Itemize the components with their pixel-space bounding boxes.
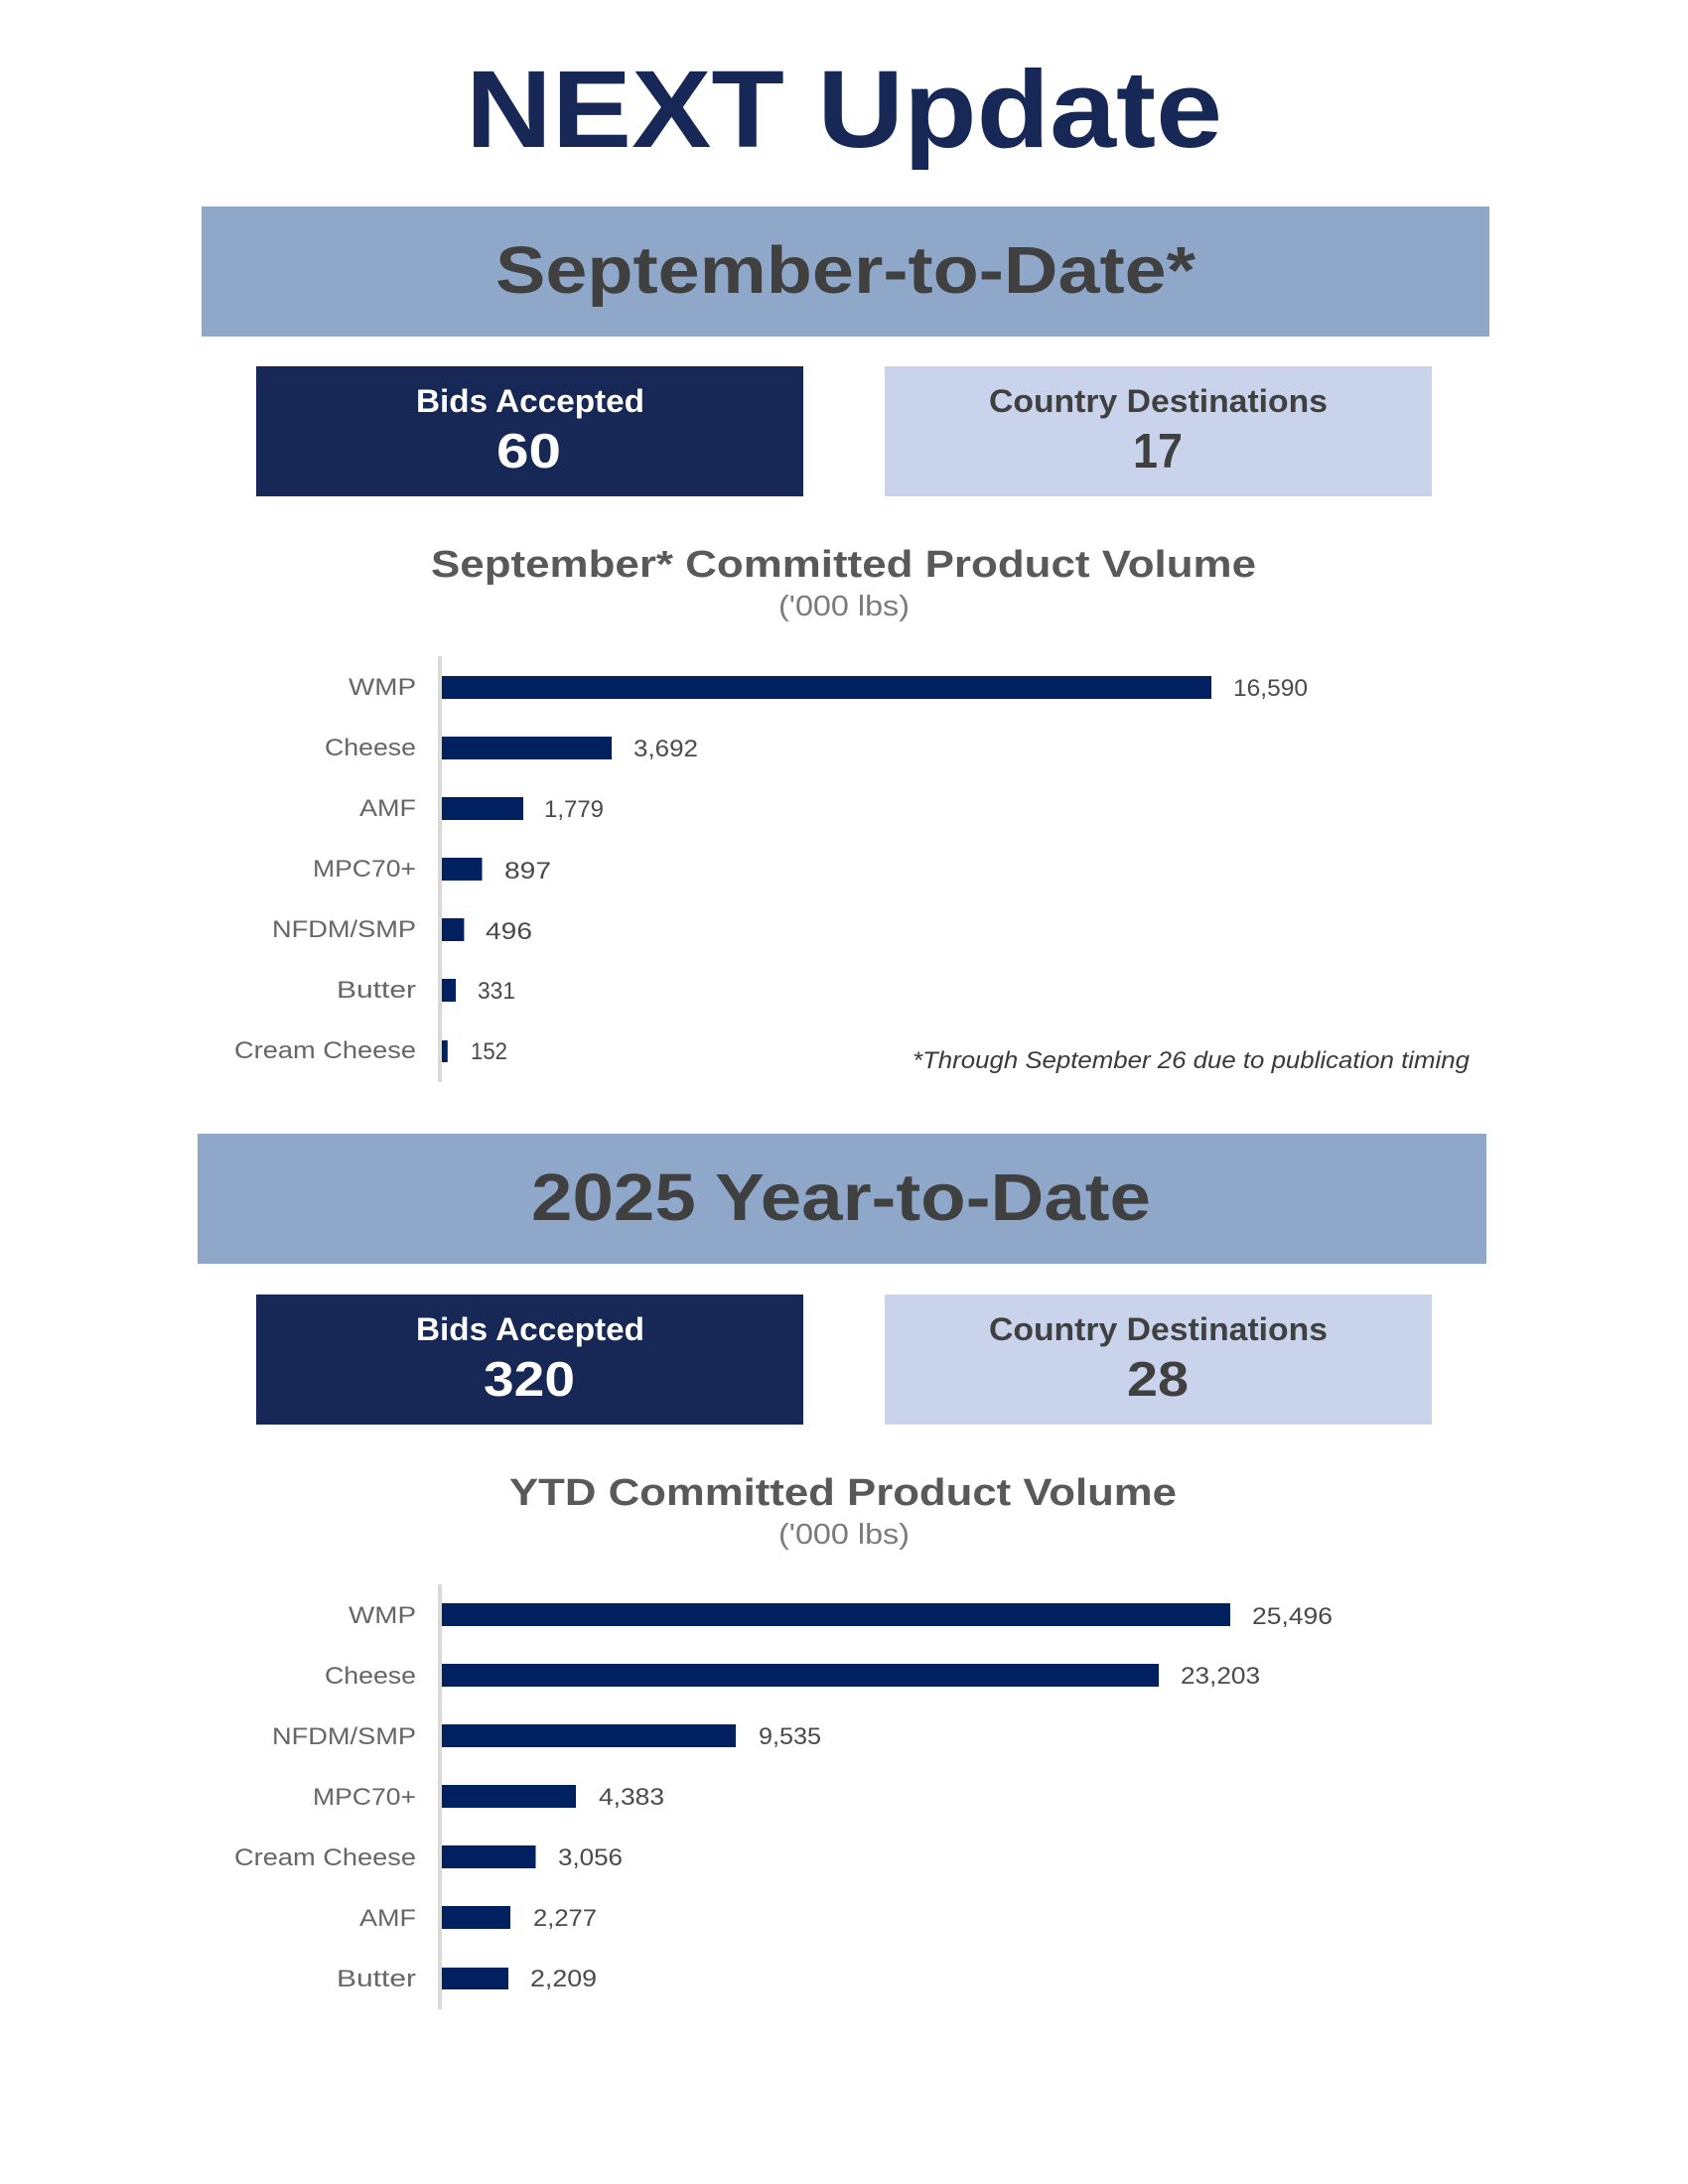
stat card: bids accepted: Bids Accepted [416, 1311, 644, 1347]
title: NEXT Update [466, 49, 1222, 171]
bar: Butter 331 [337, 977, 515, 1005]
bar: WMP 25,496 [349, 1602, 1333, 1630]
section banner: 2025 Year-to-Date: 2025 Year-to-Date [531, 1160, 1151, 1235]
panel: September-to-Date section [202, 206, 1489, 1082]
bar chart: YTD committed product volume [234, 1584, 1333, 2009]
section banner: September-to-Date [202, 206, 1489, 337]
bar: WMP 16,590 [349, 674, 1308, 702]
bar: MPC70+ 4,383: MPC70+ [313, 1784, 416, 1811]
bar: AMF 2,277 [359, 1905, 597, 1932]
stat card: bids accepted [256, 1295, 803, 1425]
chart heading: YTD committed volume [509, 1472, 1177, 1551]
stat card: bids accepted: Bids Accepted [416, 383, 644, 419]
chart heading: YTD committed volume: ('000 lbs) [778, 1519, 910, 1551]
bar: MPC70+ 897: MPC70+ [313, 856, 416, 883]
stat card: country destinations: Country Destinations [989, 383, 1328, 419]
bar: Cream Cheese 3,056: Cream Cheese [234, 1844, 416, 1871]
chart heading: September committed volume: September* Committed Product Volume [431, 544, 1256, 586]
bar: Cream Cheese 152: 152 [471, 1038, 507, 1065]
bar: Butter 2,209: 2,209 [530, 1966, 597, 1992]
bar: WMP 25,496: 25,496 [1252, 1603, 1333, 1630]
bar: AMF 1,779 [359, 795, 604, 823]
footnote: *Through September 26 due to publication timing [913, 1047, 1471, 1074]
bar: MPC70+ 4,383 [313, 1784, 664, 1811]
stat card: country destinations: 28 [1127, 1353, 1189, 1407]
bar: Cheese 3,692: 3,692 [633, 736, 698, 762]
bar: WMP 16,590: WMP [349, 674, 416, 701]
bar: Cream Cheese 3,056: 3,056 [558, 1844, 623, 1871]
bar: Butter 331: Butter [337, 977, 416, 1004]
bar: MPC70+ 897: 897 [504, 858, 551, 885]
bar: Cheese 3,692 [325, 735, 698, 762]
stat card: country destinations [885, 366, 1432, 496]
bar: NFDM/SMP 9,535 [272, 1723, 821, 1750]
bar chart: September committed product volume [234, 656, 1308, 1082]
bar: AMF 1,779: 1,779 [544, 796, 604, 823]
bar: WMP 16,590: 16,590 [1233, 675, 1308, 702]
bar: AMF 2,277: AMF [359, 1905, 416, 1932]
stat card: country destinations: 17 [1133, 425, 1183, 478]
panel: 2025 Year-to-Date section [198, 1134, 1486, 2009]
stat card: country destinations: Country Destinations [989, 1311, 1328, 1347]
bar: Cheese 3,692: Cheese [325, 735, 416, 761]
bar: Cream Cheese 152: Cream Cheese [234, 1037, 416, 1064]
bar: Cheese 23,203 [325, 1663, 1260, 1690]
bar: NFDM/SMP 496: NFDM/SMP [272, 916, 416, 943]
bar: NFDM/SMP 496: 496 [486, 918, 532, 945]
bar: Cheese 23,203: Cheese [325, 1663, 416, 1690]
section banner: 2025 Year-to-Date [198, 1134, 1486, 1264]
bar: Cream Cheese 3,056 [234, 1844, 623, 1871]
chart heading: September committed volume [431, 544, 1256, 622]
bar: Cheese 23,203: 23,203 [1181, 1663, 1260, 1690]
bar: NFDM/SMP 9,535: NFDM/SMP [272, 1723, 416, 1750]
stat card: bids accepted: 60 [496, 425, 561, 478]
stat card: bids accepted: 320 [484, 1353, 575, 1407]
bar: NFDM/SMP 496 [272, 916, 532, 945]
section banner: September-to-Date: September-to-Date* [495, 233, 1196, 308]
stat card: country destinations [885, 1295, 1432, 1425]
bar: AMF 2,277: 2,277 [533, 1905, 597, 1932]
bar: Butter 331: 331 [478, 978, 515, 1005]
bar: AMF 1,779: AMF [359, 795, 416, 822]
bar: WMP 25,496: WMP [349, 1602, 416, 1629]
chart heading: September committed volume: ('000 lbs) [778, 591, 910, 622]
bar: MPC70+ 897 [313, 856, 551, 885]
bar: NFDM/SMP 9,535: 9,535 [759, 1723, 821, 1750]
bar: MPC70+ 4,383: 4,383 [599, 1784, 664, 1811]
stat card: bids accepted [256, 366, 803, 496]
bar: Cream Cheese 152 [234, 1037, 507, 1065]
bar: Butter 2,209 [337, 1966, 597, 1992]
chart heading: YTD committed volume: YTD Committed Product Volume [509, 1472, 1177, 1514]
bar: Butter 2,209: Butter [337, 1966, 416, 1992]
